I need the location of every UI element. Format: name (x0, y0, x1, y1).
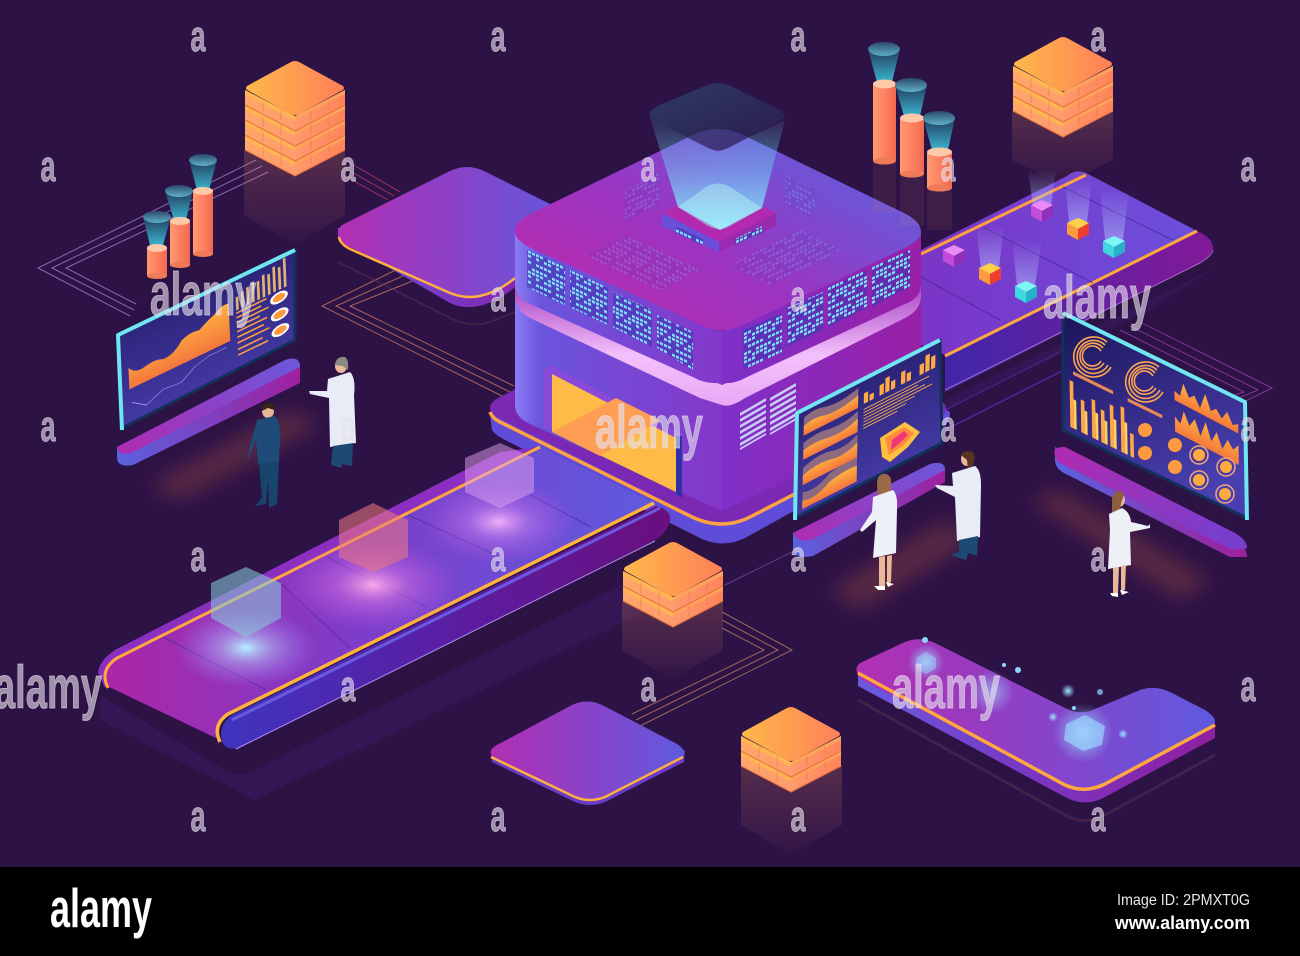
watermark letters: a (940, 402, 956, 451)
watermark letters: a (640, 142, 656, 191)
watermark letters: a (640, 662, 656, 711)
brick stack: top right (1012, 37, 1113, 185)
footer logo: alamy (50, 877, 152, 939)
area charts back (802, 388, 858, 509)
stripe (491, 757, 683, 800)
bar 3 (923, 111, 955, 192)
radar chart (880, 422, 920, 462)
watermark letters: a (1240, 662, 1256, 711)
image id: Image ID: 2PMXT0G (1117, 892, 1250, 909)
watermark words: alamy (892, 654, 1000, 721)
platform top (338, 167, 570, 296)
watermark letters: a (790, 792, 806, 841)
person: woman centre (860, 474, 897, 590)
dashboard: right (1063, 313, 1247, 520)
watermark letters: a (340, 662, 356, 711)
belt dividers (163, 495, 591, 690)
watermark letters: a (190, 792, 206, 841)
screen body (1063, 313, 1247, 518)
watermark letters: a (940, 142, 956, 191)
area charts front (802, 395, 858, 509)
watermark letters: a (1090, 792, 1106, 841)
cube: pink (285, 503, 461, 631)
watermark letters: a (1090, 12, 1106, 61)
watermark letters: a (1240, 142, 1256, 191)
watermark letters: a (340, 142, 356, 191)
floor glow reflections (150, 410, 1210, 610)
windows right (743, 250, 910, 370)
cube row back (1031, 200, 1125, 258)
watermark letters: a (1090, 532, 1106, 581)
roof (515, 129, 921, 330)
bar 3 (189, 154, 217, 257)
platform top (490, 702, 684, 800)
bar chart (1070, 380, 1134, 458)
brick stack: top left (244, 61, 345, 245)
back rim (98, 447, 538, 688)
bar 1 (143, 211, 171, 279)
central building (490, 129, 950, 544)
screen shelf: left (117, 359, 300, 466)
band labels (1073, 371, 1162, 418)
website: www.alamy.com (1114, 913, 1250, 933)
belt surface (921, 171, 1197, 355)
dashboard: centre (795, 340, 942, 520)
line chart (131, 347, 228, 412)
cube row front (943, 245, 1037, 303)
watermark letters: a (340, 402, 356, 451)
circle charts (1138, 423, 1235, 503)
glowing band (515, 280, 921, 406)
platform rim (491, 750, 685, 805)
screen frame (118, 250, 295, 430)
rim highlight (232, 508, 660, 720)
watermark letters: a (40, 142, 56, 191)
cube beams (976, 170, 1129, 285)
platform: bottom right L-shape (856, 637, 1215, 802)
roof data pattern (585, 172, 840, 290)
cylinder chart: left (143, 154, 217, 279)
data cubes on right belt (943, 170, 1129, 303)
bar chart (864, 351, 936, 404)
conveyor belt: right (921, 171, 1213, 392)
screen body (795, 340, 942, 518)
cube: violet (421, 443, 577, 564)
circuit lines (38, 160, 1272, 726)
rim edge (236, 541, 655, 749)
belt dividers (921, 187, 1173, 320)
platform rim (858, 668, 1215, 802)
watermark letters: a (490, 792, 506, 841)
screen frame (795, 340, 940, 520)
windows left (527, 250, 693, 370)
watermark letters: a (190, 12, 206, 61)
watermark letters: a (1240, 402, 1256, 451)
belt surface (105, 447, 652, 738)
brick stack: centre (622, 542, 723, 680)
watermark letters: a (490, 532, 506, 581)
reflections (873, 163, 952, 230)
bar 1 (868, 42, 900, 164)
donut icons (270, 288, 289, 340)
vents (740, 383, 796, 450)
upper band (515, 232, 921, 383)
base plate (490, 280, 950, 544)
bar chart (235, 257, 287, 311)
footer bar (0, 867, 1300, 956)
screen shelf: centre (793, 463, 945, 557)
platform: upper left (338, 167, 570, 307)
screen shelf: right (1054, 447, 1247, 557)
lower stripe (217, 503, 654, 742)
watermark letters: a (40, 402, 56, 451)
door (544, 365, 682, 498)
watermark letters: a (790, 532, 806, 581)
cylinder chart: right (868, 42, 955, 230)
platform top (856, 639, 1215, 788)
hologram beam (650, 83, 785, 230)
platform rim (338, 220, 570, 307)
object reflections (100, 262, 1215, 820)
platform: bottom centre (490, 702, 685, 805)
watermark letters: a (190, 532, 206, 581)
stripe (339, 237, 515, 297)
brick stack: bottom (741, 707, 842, 855)
watermark words (0, 261, 1151, 721)
watermark words: alamy (1043, 264, 1151, 331)
bar 2 (895, 78, 927, 178)
spike charts (1174, 379, 1239, 465)
roof pedestal (662, 184, 776, 252)
screen frame (1063, 313, 1247, 520)
person: man in suit (247, 403, 280, 508)
cube: cyan (174, 567, 318, 688)
belt rim (221, 506, 670, 749)
watermark letters: a (790, 12, 806, 61)
bar 2 (165, 185, 193, 268)
watermark letters: a (490, 12, 506, 61)
watermark letters: a (490, 272, 506, 321)
belt rim (945, 231, 1213, 392)
watermark words: alamy (595, 394, 703, 461)
horizontal bars (236, 297, 270, 356)
horizontal lines (863, 374, 932, 429)
ring charts (1074, 337, 1163, 402)
area chart (128, 303, 230, 389)
conveyor belt: front (98, 447, 670, 749)
sparkle glows (908, 637, 1128, 763)
person: woman right (1108, 491, 1150, 597)
back stripe (921, 175, 1086, 254)
screen body (118, 250, 295, 428)
dashboard: left (118, 250, 295, 430)
person: scientist centre (935, 451, 981, 560)
lower walls (515, 240, 921, 511)
person: scientist left (309, 357, 356, 468)
upper stripe (105, 447, 540, 688)
watermark words: alamy (150, 261, 256, 328)
stripe (858, 673, 1215, 789)
front stripe (945, 231, 1197, 356)
watermark letters: a (790, 272, 806, 321)
